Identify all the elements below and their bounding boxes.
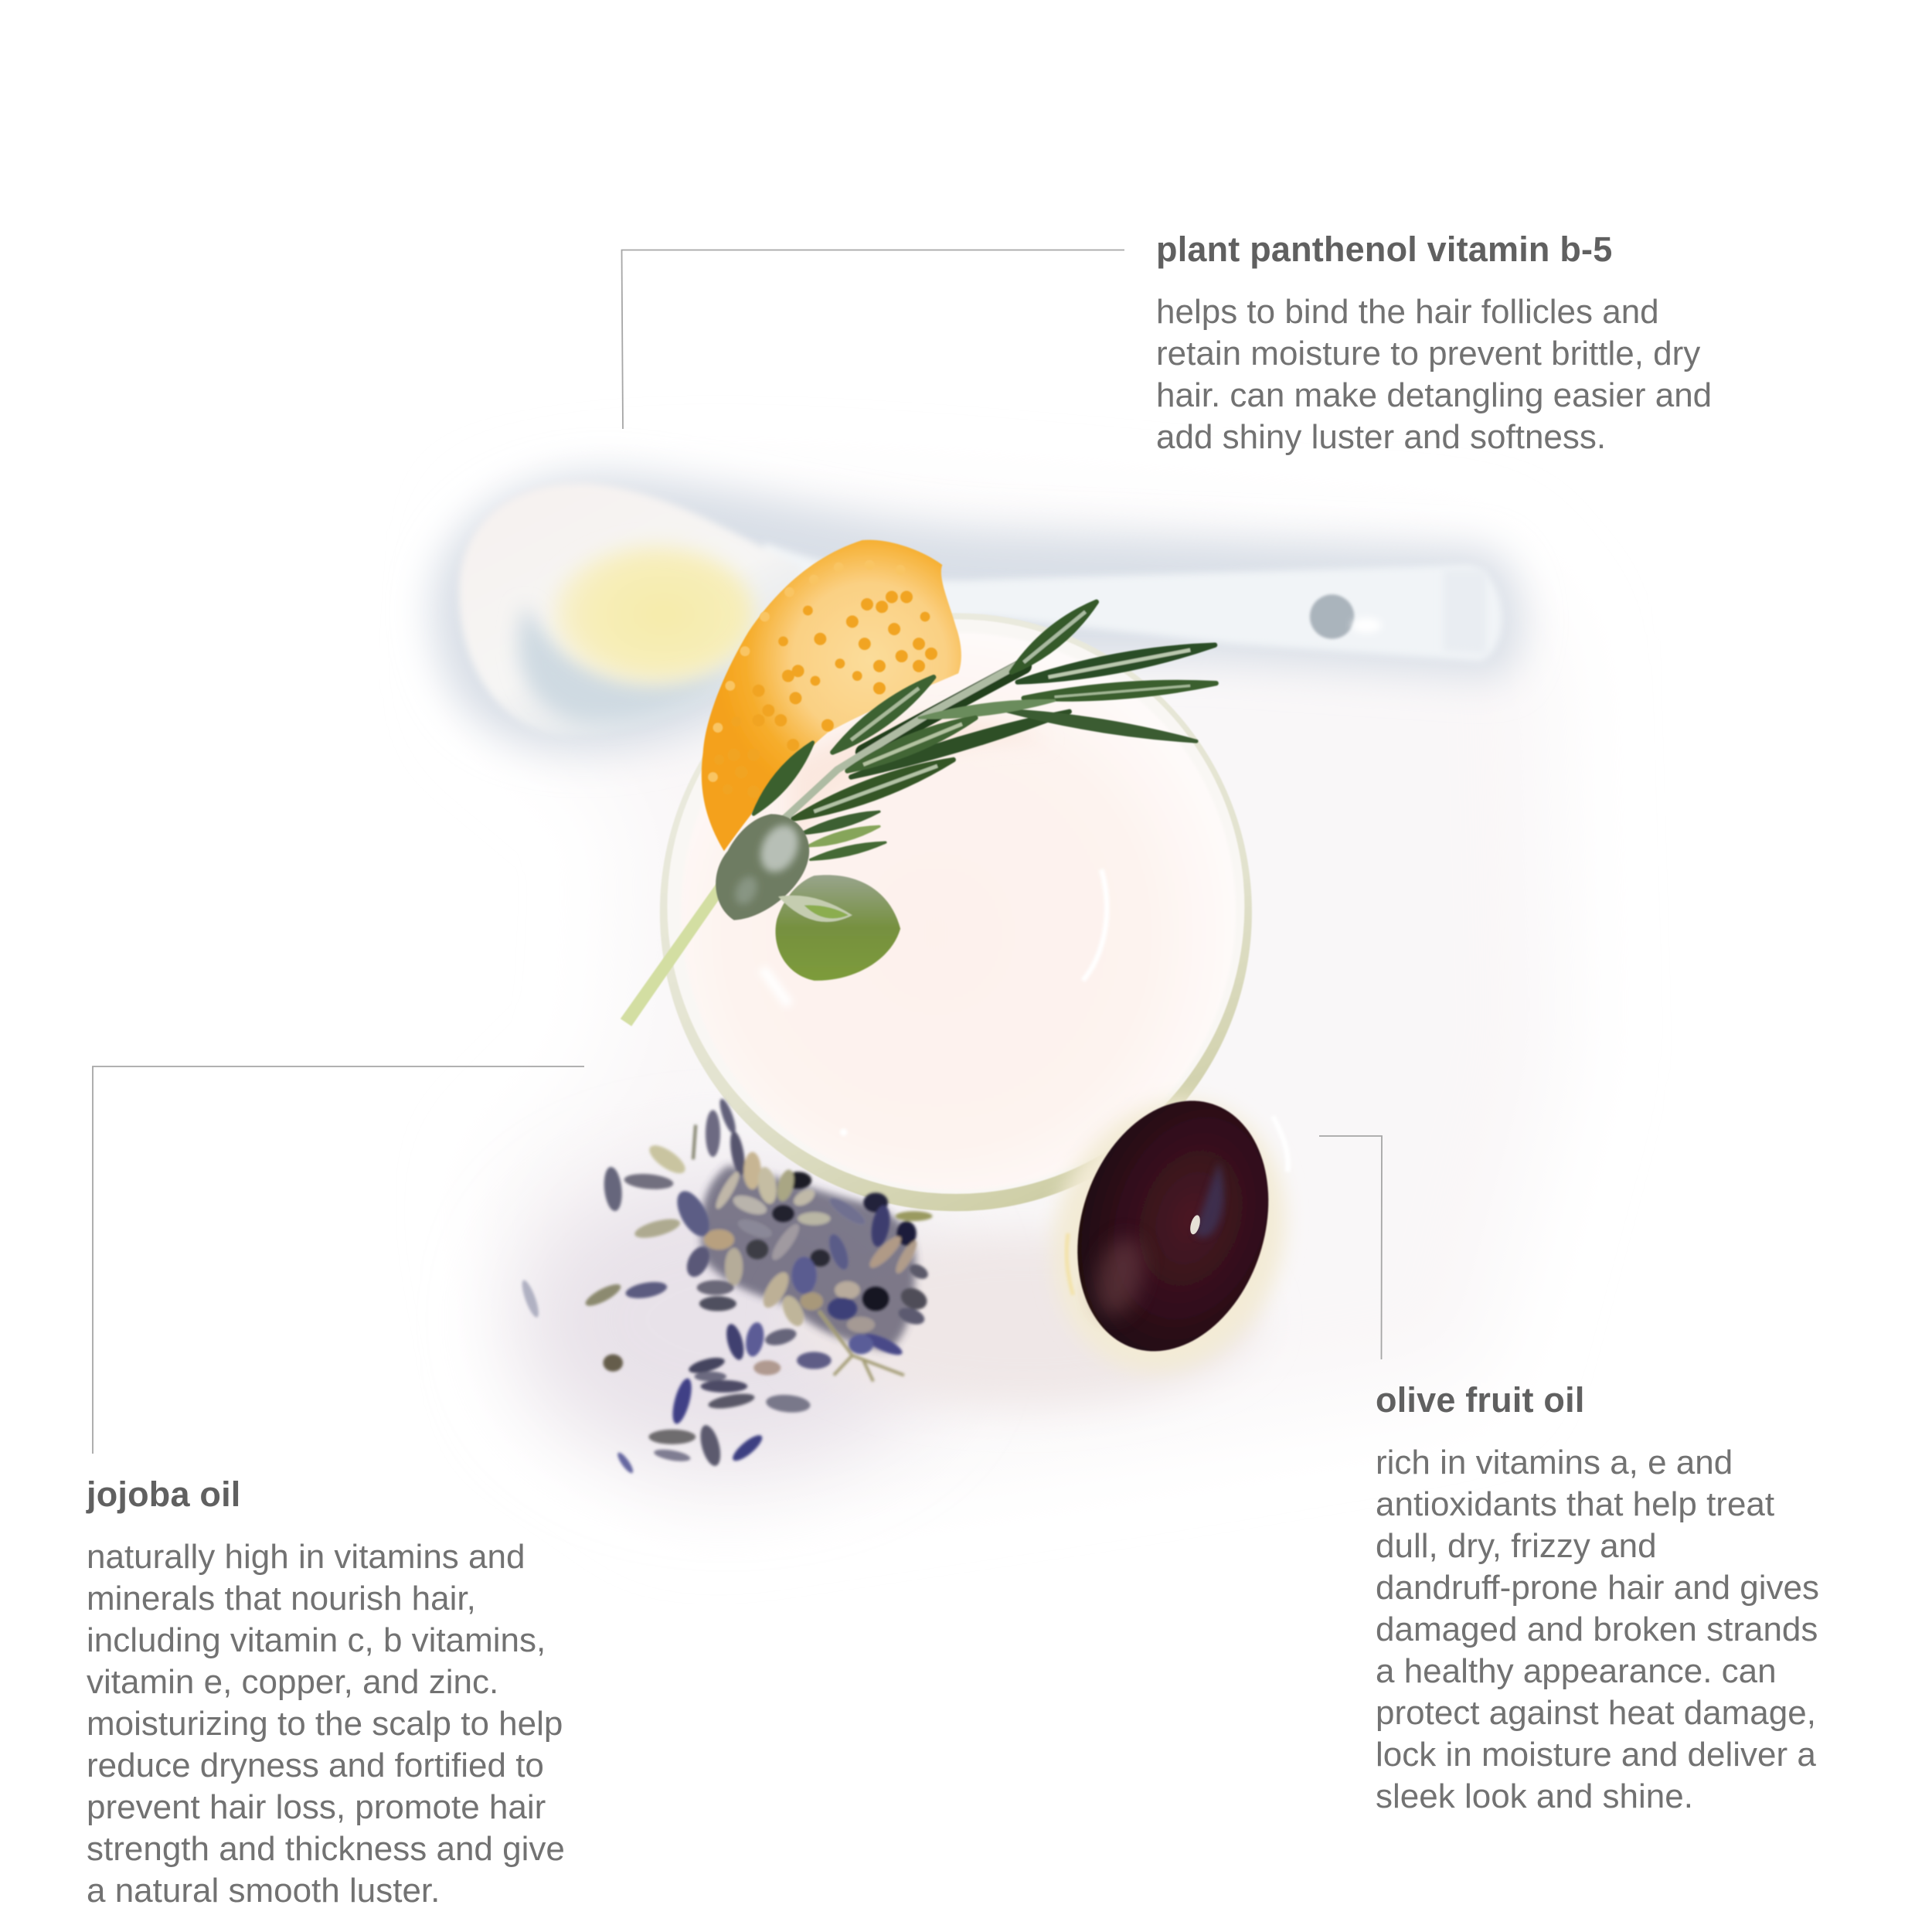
body: jojoba oil: strength and thickness and give	[87, 1830, 565, 1868]
needle low 1	[793, 760, 954, 819]
needle low 2	[801, 811, 879, 834]
body: olive fruit oil: lock in moisture and deliver a	[1376, 1736, 1816, 1774]
spoon hole	[1310, 594, 1354, 639]
leaf green	[775, 875, 900, 981]
body: olive fruit oil	[1376, 1444, 1819, 1815]
leader line: olive fruit oil	[1319, 1136, 1382, 1359]
needle lower dark	[851, 712, 1070, 777]
olive body	[1046, 1076, 1299, 1376]
body: olive fruit oil: dandruff-prone hair and gives	[1376, 1569, 1819, 1607]
body: jojoba oil: naturally high in vitamins and	[87, 1538, 525, 1576]
body: plant panthenol: retain moisture to prevent brittle, dry	[1156, 335, 1700, 372]
leader line: plant panthenol	[621, 250, 1124, 429]
spoon	[431, 474, 1522, 751]
body: jojoba oil: vitamin e, copper, and zinc.	[87, 1663, 498, 1701]
spoon bowl	[459, 483, 801, 736]
glass bowl with cream	[660, 613, 1252, 1211]
cream	[681, 633, 1236, 1190]
leaves	[716, 814, 900, 981]
body: olive fruit oil: a healthy appearance. can	[1376, 1652, 1777, 1690]
peel pores	[714, 590, 937, 798]
text block: jojoba oil	[86, 1475, 565, 1910]
needle left	[753, 743, 813, 814]
body: plant panthenol: add shiny luster and softness.	[1156, 418, 1606, 456]
body: jojoba oil: prevent hair loss, promote hair	[87, 1788, 546, 1826]
leader line: jojoba oil	[93, 1066, 584, 1454]
peel pale pores on orange rim	[708, 560, 905, 782]
body: plant panthenol	[1156, 293, 1712, 456]
body: plant panthenol: hair. can make detangling easier and	[1156, 376, 1712, 414]
lavender dark base	[701, 1165, 916, 1351]
body: olive fruit oil: rich in vitamins a, e and	[1376, 1444, 1733, 1481]
body: olive fruit oil: protect against heat damage,	[1376, 1694, 1816, 1732]
lavender buds	[519, 1097, 933, 1475]
needle right 3	[1005, 710, 1196, 741]
text block: olive fruit oil	[1376, 1380, 1819, 1815]
needle low 4	[811, 842, 886, 859]
soft background haze	[481, 501, 1566, 1505]
spoon handle	[740, 543, 1502, 661]
needle top	[1012, 602, 1097, 672]
body: olive fruit oil: damaged and broken strands	[1376, 1611, 1818, 1648]
olive	[1019, 1070, 1320, 1403]
orange peel	[702, 540, 961, 851]
body: jojoba oil: including vitamin c, b vitamins,	[87, 1621, 546, 1659]
body: olive fruit oil: antioxidants that help treat	[1376, 1485, 1774, 1523]
scene scaled group	[431, 474, 1566, 1505]
rosemary stem	[621, 664, 1024, 1026]
spoon shadow	[431, 474, 1522, 751]
needle mid 2	[919, 700, 1055, 718]
olive highlight	[1189, 1214, 1202, 1236]
needle low 3	[808, 826, 879, 846]
body: jojoba oil: moisturizing to the scalp to help	[87, 1705, 563, 1743]
rosemary sprig	[621, 602, 1216, 1026]
spoon oil	[553, 545, 755, 683]
leaf bud	[778, 896, 852, 922]
body: jojoba oil: reduce dryness and fortified to	[87, 1747, 544, 1784]
heading: jojoba oil: jojoba oil	[87, 1475, 241, 1514]
needle mid 3	[847, 718, 975, 771]
body: jojoba oil: a natural smooth luster.	[87, 1872, 440, 1910]
body: jojoba oil: minerals that nourish hair,	[87, 1580, 476, 1617]
body: olive fruit oil: dull, dry, frizzy and	[1376, 1527, 1657, 1565]
body: olive fruit oil: sleek look and shine.	[1376, 1777, 1693, 1815]
body: plant panthenol: helps to bind the hair follicles and	[1156, 293, 1659, 331]
leaf grey	[716, 814, 809, 920]
olive oil halo	[1019, 1070, 1320, 1403]
text block: plant panthenol vitamin b-5	[1156, 230, 1712, 456]
heading: plant panthenol: plant panthenol vitamin b-5	[1156, 230, 1612, 269]
glass dish rim	[660, 613, 1252, 1211]
body: jojoba oil	[87, 1538, 565, 1910]
needle right 2	[1024, 682, 1216, 699]
needle mid 1	[832, 677, 934, 753]
needle right 1	[1018, 645, 1215, 682]
heading: olive fruit oil: olive fruit oil	[1376, 1380, 1585, 1420]
